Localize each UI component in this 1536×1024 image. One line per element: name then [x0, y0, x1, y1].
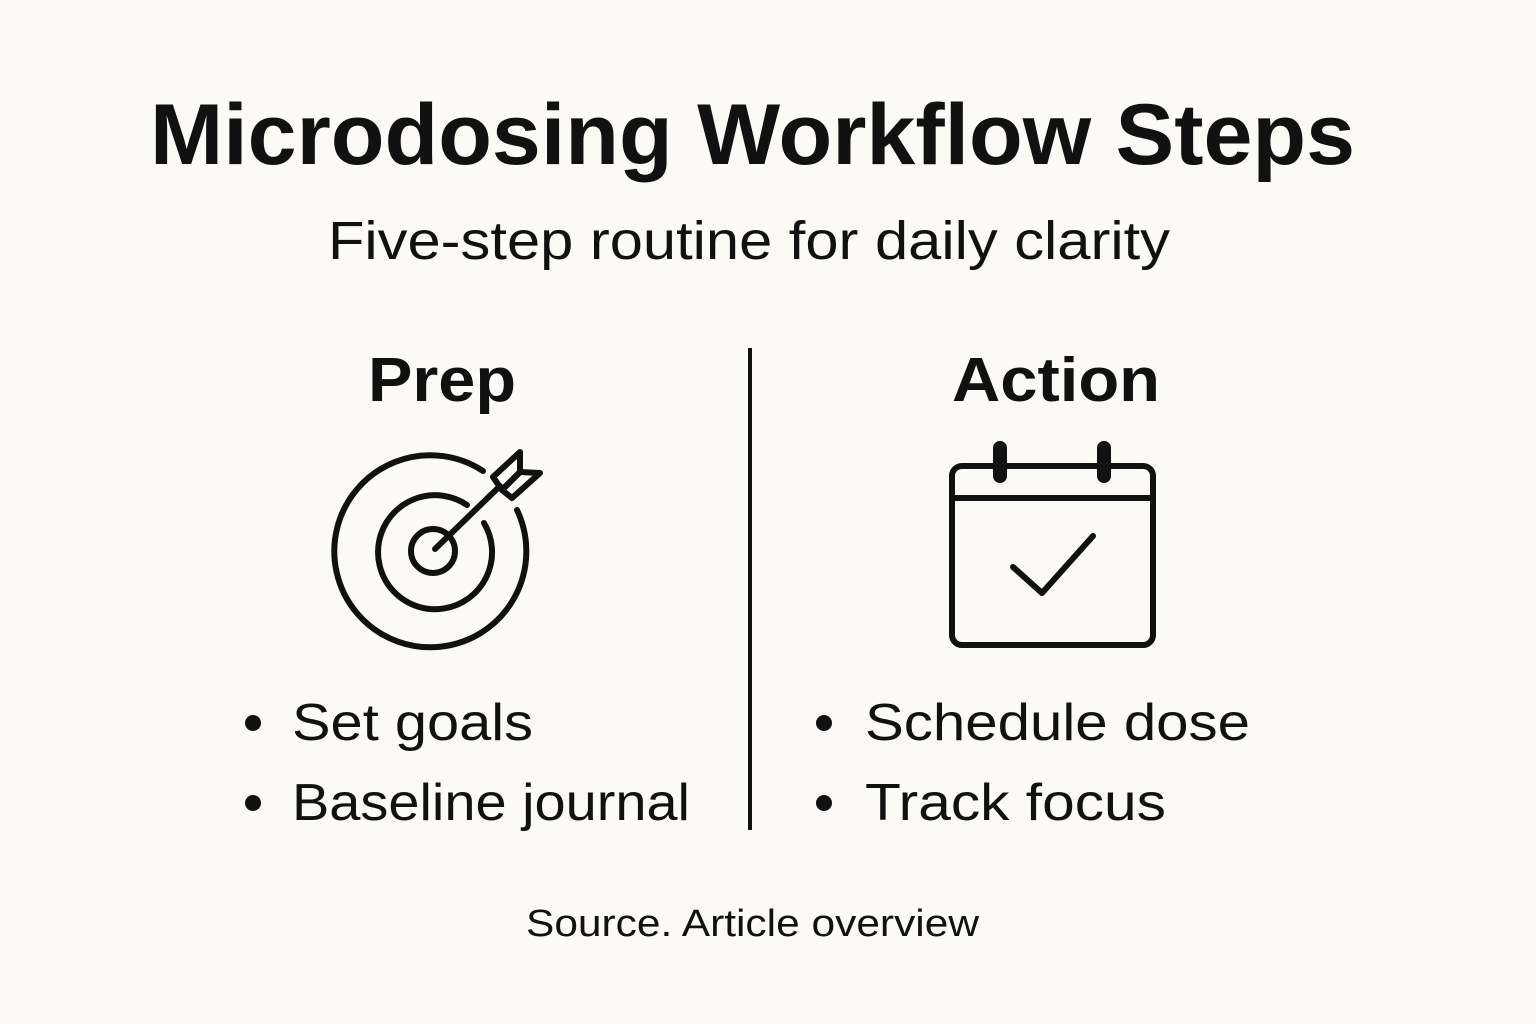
icon: target with arrow: [334, 452, 540, 647]
heading: prep: Prep: [368, 346, 516, 415]
bullet list: action: Track focus: [865, 774, 1166, 832]
bullet list: prep: Baseline journal: [292, 774, 690, 832]
title: Microdosing Workflow Steps: [150, 87, 1355, 183]
bullet list: action: [816, 694, 1250, 832]
heading: action: Action: [952, 346, 1160, 415]
panel: prep: [245, 346, 690, 832]
subtitle: Five-step routine for daily clarity: [328, 211, 1170, 271]
divider: [748, 348, 752, 830]
bullet list: action: Schedule dose: [865, 694, 1250, 752]
source note: Source. Article overview: [526, 903, 980, 945]
icon: calendar with check: [952, 448, 1153, 645]
bullet list: prep: Set goals: [292, 694, 533, 752]
panel: action: [816, 346, 1250, 832]
bullet list: prep: [245, 694, 690, 832]
